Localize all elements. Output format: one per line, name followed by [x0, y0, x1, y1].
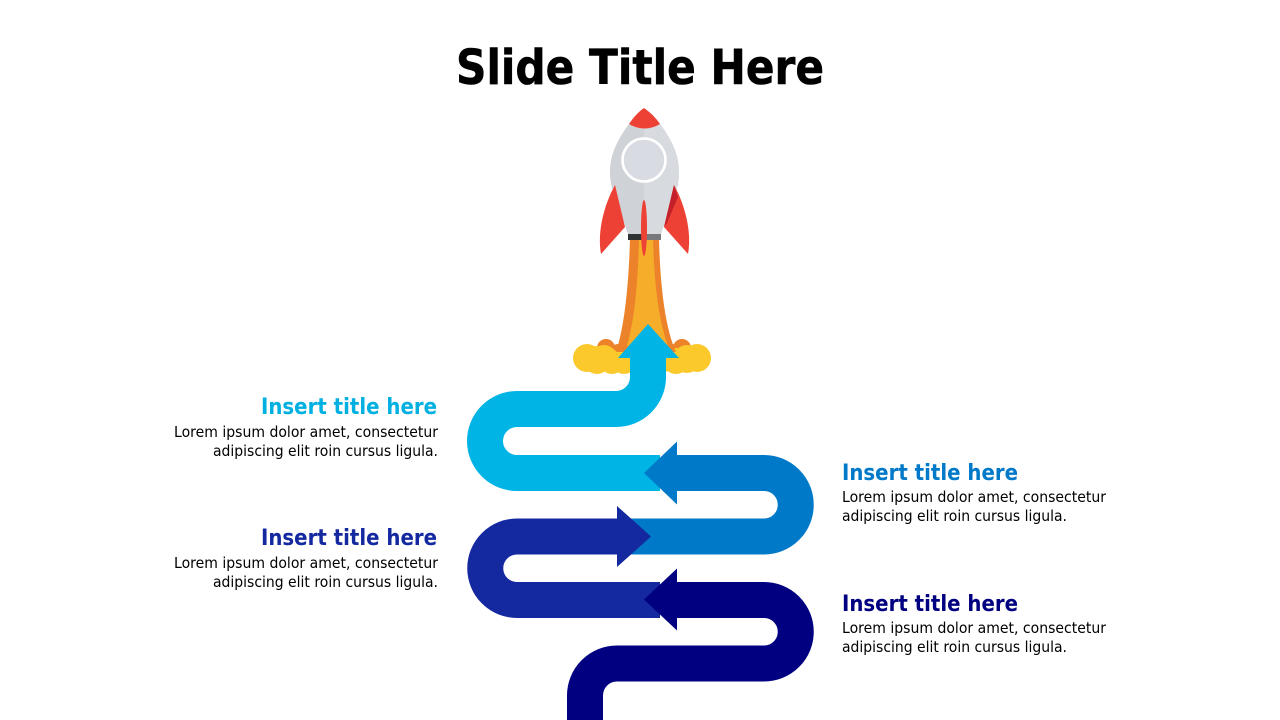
body — [174, 554, 439, 591]
text block: bottom left — [174, 526, 439, 591]
arrow segment 3: royal blue — [485, 506, 660, 600]
heading: Insert title here — [842, 592, 1018, 617]
exhaust clouds — [573, 339, 711, 374]
body: adipiscing elit roin cursus ligula. — [213, 573, 438, 591]
left fin — [600, 185, 625, 254]
arrow segment 2: medium blue — [625, 442, 796, 536]
body: adipiscing elit roin cursus ligula. — [213, 442, 438, 460]
text block: top right — [842, 461, 1107, 525]
centre fin — [641, 200, 647, 256]
body: adipiscing elit roin cursus ligula. — [842, 638, 1067, 656]
body — [842, 619, 1107, 656]
heading: Insert title here — [261, 395, 437, 420]
heading: Insert title here — [261, 526, 437, 551]
body — [842, 488, 1107, 525]
heading: Insert title here — [842, 461, 1018, 486]
body: Lorem ipsum dolor amet, consectetur — [174, 423, 439, 441]
nose cone — [629, 108, 660, 128]
arrow segment 4: navy — [585, 568, 796, 720]
body: adipiscing elit roin cursus ligula. — [842, 507, 1067, 525]
body: Lorem ipsum dolor amet, consectetur — [842, 619, 1107, 637]
title: Slide Title Here — [456, 40, 824, 96]
right fin — [664, 185, 689, 254]
text block: bottom right — [842, 592, 1107, 656]
body — [174, 423, 439, 460]
porthole — [622, 138, 666, 182]
body: Lorem ipsum dolor amet, consectetur — [174, 554, 439, 572]
nozzle — [628, 234, 661, 240]
arrow segment 1: light blue — [485, 324, 679, 473]
rocket body — [610, 124, 679, 234]
body: Lorem ipsum dolor amet, consectetur — [842, 488, 1107, 506]
flame — [616, 238, 676, 352]
text block: top left — [174, 395, 439, 460]
icon: rocket with exhaust — [573, 108, 711, 374]
